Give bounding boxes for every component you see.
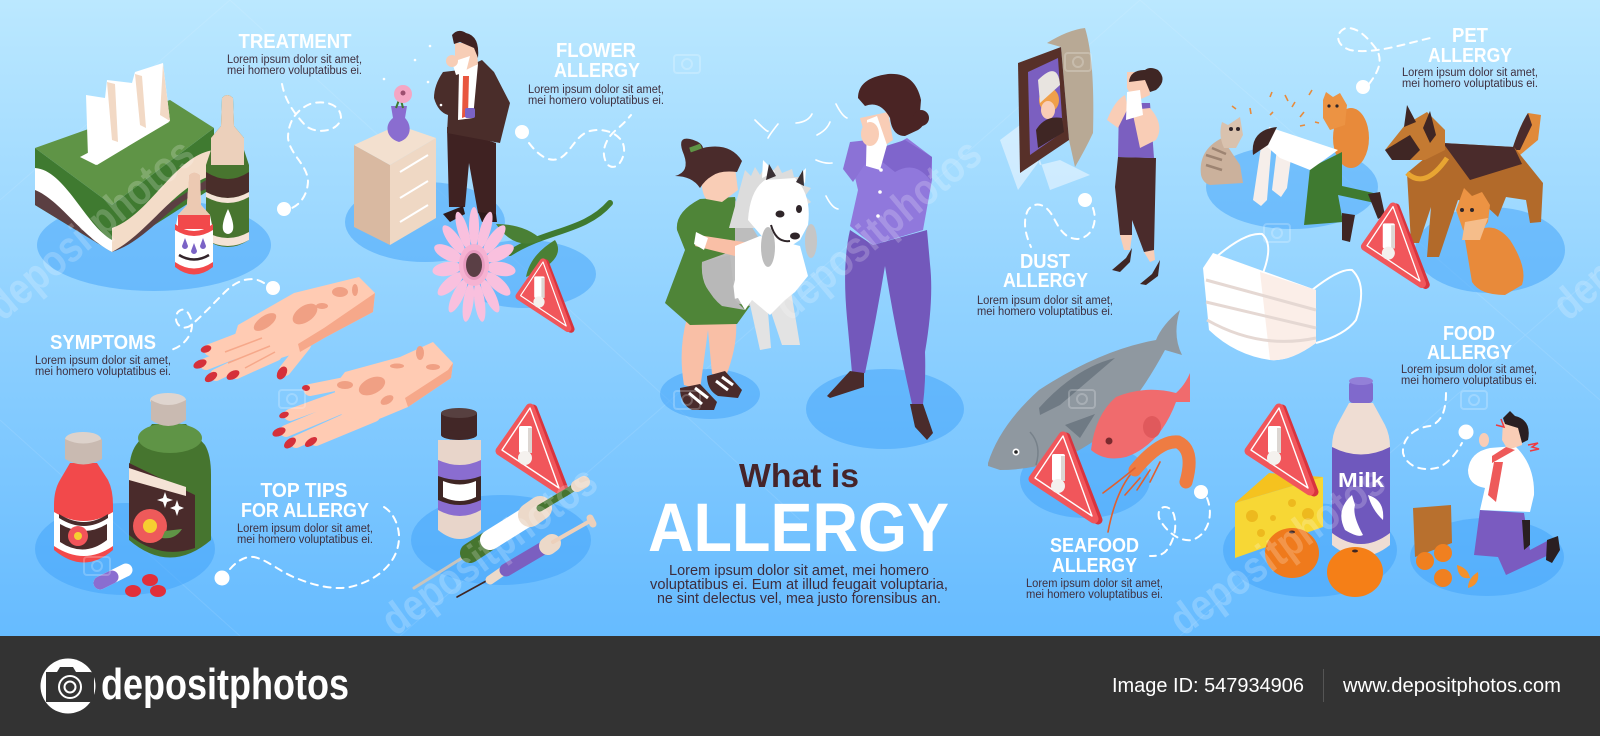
figure: tabby cat	[1201, 117, 1243, 185]
panel: flower allergy	[354, 31, 664, 329]
label text: milk: Milk	[1338, 470, 1385, 492]
icon: flying pet hair	[1232, 90, 1319, 126]
text: flower allergy description	[528, 84, 664, 107]
dashed connector: flower	[529, 115, 631, 167]
figure: girl holding dog	[665, 139, 760, 410]
text: intro paragraph: voluptatibus ei. Eum at illud feugait voluptaria,	[650, 577, 948, 593]
logo wordmark: depositphotos	[101, 660, 349, 709]
text: top tips description: Lorem ipsum dolor sit amet,	[237, 523, 373, 535]
connector dot	[277, 202, 291, 216]
text: seafood allergy description: mei homero voluptatibus ei.	[1026, 589, 1163, 601]
icon: chest of drawers with vase	[354, 85, 436, 245]
heading: food allergy	[1427, 323, 1513, 364]
icon: small eye drop bottle	[175, 172, 213, 274]
heading: flower allergy	[554, 40, 641, 82]
figure: orange cat behind man	[1323, 92, 1369, 168]
heading: what is: What is	[739, 457, 859, 494]
text: flower allergy description: mei homero voluptatibus ei.	[528, 95, 664, 107]
text: intro paragraph: ne sint delectus vel, mea justo forensibus an.	[657, 591, 941, 607]
dashed connector: seafood	[1150, 498, 1210, 556]
watermark: depositphotos text: depositphotos	[765, 129, 991, 330]
heading: flower allergy: FLOWER	[556, 40, 637, 62]
text: dust allergy description: mei homero voluptatibus ei.	[977, 306, 1113, 318]
dashed connector: treatment	[282, 84, 341, 208]
icon: warning triangle	[1249, 408, 1314, 492]
heading: allergy: ALLERGY	[648, 489, 949, 566]
heading: symptoms: SYMPTOMS	[50, 332, 156, 354]
text: pet allergy description	[1402, 67, 1538, 90]
heading: top tips for allergy	[241, 480, 370, 522]
text: food allergy description: Lorem ipsum dolor sit amet,	[1401, 364, 1537, 376]
website url: www.depositphotos.com	[1342, 675, 1561, 697]
connector dot	[515, 125, 529, 139]
text: treatment description: mei homero voluptatibus ei.	[227, 65, 362, 77]
panel: girl with dog and sneezing woman	[665, 74, 933, 440]
panel: symptoms	[35, 277, 453, 451]
panel: top tips for allergy	[54, 393, 593, 597]
icon: shrimp	[1103, 442, 1189, 532]
icon: gerbera flower with stem	[432, 203, 610, 323]
connector dot	[266, 281, 280, 295]
heading: dust allergy: DUST	[1020, 251, 1070, 273]
icon: food bag and mandarins	[1413, 505, 1478, 588]
text: pet allergy description: Lorem ipsum dolor sit amet,	[1402, 67, 1538, 79]
dashed connector: dust	[1025, 205, 1095, 247]
icon: cheese	[1235, 473, 1323, 558]
heading: flower allergy: ALLERGY	[554, 60, 641, 82]
panel: food allergy	[1235, 323, 1560, 597]
watermark: camera icons	[84, 53, 1487, 575]
figure: man sneezing on all fours	[1253, 127, 1385, 242]
heading: food allergy: FOOD	[1443, 323, 1495, 345]
text: dust allergy description: Lorem ipsum dolor sit amet,	[977, 295, 1113, 307]
dashed connector: top tips	[230, 507, 399, 588]
figure: choking man kneeling	[1468, 411, 1560, 575]
footer bar	[0, 636, 1600, 736]
ground shadows	[35, 145, 1565, 597]
heading: pet allergy: PET	[1452, 25, 1488, 47]
heading: top tips for allergy: FOR ALLERGY	[241, 500, 370, 522]
icon: tissue box	[35, 63, 214, 252]
icon: depositphotos camera logo	[40, 658, 96, 714]
figure: german shepherd dog	[1385, 105, 1543, 257]
icon: syringes	[414, 482, 593, 597]
text: symptoms description	[35, 355, 171, 378]
icon: warning triangle	[500, 408, 565, 492]
text: food allergy description	[1401, 364, 1537, 387]
text: intro paragraph	[650, 563, 948, 607]
text: seafood allergy description	[1026, 578, 1163, 601]
connector dot	[1458, 424, 1474, 440]
text: pet allergy description: mei homero voluptatibus ei.	[1402, 78, 1538, 90]
icon: oranges	[1265, 528, 1383, 597]
panel: treatment	[35, 31, 362, 274]
text: treatment description: Lorem ipsum dolor sit amet,	[227, 54, 362, 66]
connector dot	[1078, 193, 1092, 207]
icon: red syrup bottle	[54, 432, 113, 562]
icon: capsule and pills	[100, 570, 166, 597]
connector dot	[1194, 485, 1208, 499]
panel: seafood allergy	[988, 310, 1210, 601]
icon: warning triangle	[1033, 436, 1098, 520]
heading: seafood allergy	[1050, 535, 1139, 577]
icon: green syrup bottle	[129, 393, 211, 558]
icon: warning triangle	[1365, 207, 1426, 285]
connector dot	[1356, 80, 1370, 94]
text: treatment description	[227, 54, 362, 77]
icon: face mask	[1203, 234, 1361, 360]
heading: food allergy: ALLERGY	[1427, 342, 1513, 364]
icon: hand with rash, upper	[192, 277, 375, 384]
heading: dust allergy	[1003, 251, 1089, 292]
heading: pet allergy: ALLERGY	[1428, 45, 1513, 67]
heading: seafood allergy: SEAFOOD	[1050, 535, 1139, 557]
icon: grey fish	[988, 310, 1182, 470]
icon: medicine vial	[438, 408, 481, 539]
text: intro paragraph: Lorem ipsum dolor sit amet, mei homero	[669, 563, 929, 579]
connector dot	[214, 570, 230, 586]
icon: red fish	[1091, 373, 1190, 458]
dashed connector: food	[1403, 393, 1462, 469]
icon: milk bottle	[1332, 377, 1390, 556]
text: symptoms description: mei homero voluptatibus ei.	[35, 366, 171, 378]
text: food allergy description: mei homero voluptatibus ei.	[1401, 375, 1537, 387]
text: top tips description: mei homero voluptatibus ei.	[237, 534, 373, 546]
figure: white fluffy dog	[702, 160, 817, 350]
icon: warning triangle	[519, 262, 571, 329]
icon: flying hair strands	[755, 104, 847, 209]
text: dust allergy description	[977, 295, 1113, 318]
heading: dust allergy: ALLERGY	[1003, 270, 1089, 292]
icon: hand with rash, lower	[271, 342, 453, 451]
figure: orange cat front	[1456, 188, 1524, 295]
figure: sneezing woman with tissue	[1107, 68, 1163, 285]
figure: sneezing woman in purple	[827, 74, 933, 440]
icon: cobwebbed dusty portrait	[1000, 28, 1093, 190]
figure: sneezing man in suit	[383, 31, 510, 222]
heading: treatment: TREATMENT	[238, 31, 352, 53]
dashed connector: symptoms	[171, 279, 264, 350]
icon: large nose drop bottle	[206, 95, 249, 247]
title block	[648, 457, 949, 607]
text: seafood allergy description: Lorem ipsum dolor sit amet,	[1026, 578, 1163, 590]
text: symptoms description: Lorem ipsum dolor sit amet,	[35, 355, 171, 367]
text: top tips description	[237, 523, 373, 546]
text: flower allergy description: Lorem ipsum dolor sit amet,	[528, 84, 664, 96]
watermark: depositphotos text	[0, 129, 1600, 645]
dashed connector: pet	[1338, 28, 1435, 84]
panel: dust allergy	[977, 28, 1163, 318]
watermark: depositphotos text: depositphotos	[1160, 456, 1394, 645]
watermark: depositphotos text: depositphotos	[372, 456, 606, 645]
heading: seafood allergy: ALLERGY	[1052, 555, 1138, 577]
heading: pet allergy	[1428, 25, 1513, 67]
panel: pet allergy	[1201, 25, 1543, 360]
heading: top tips for allergy: TOP TIPS	[260, 480, 348, 502]
image id: Image ID: 547934906	[1112, 675, 1304, 697]
